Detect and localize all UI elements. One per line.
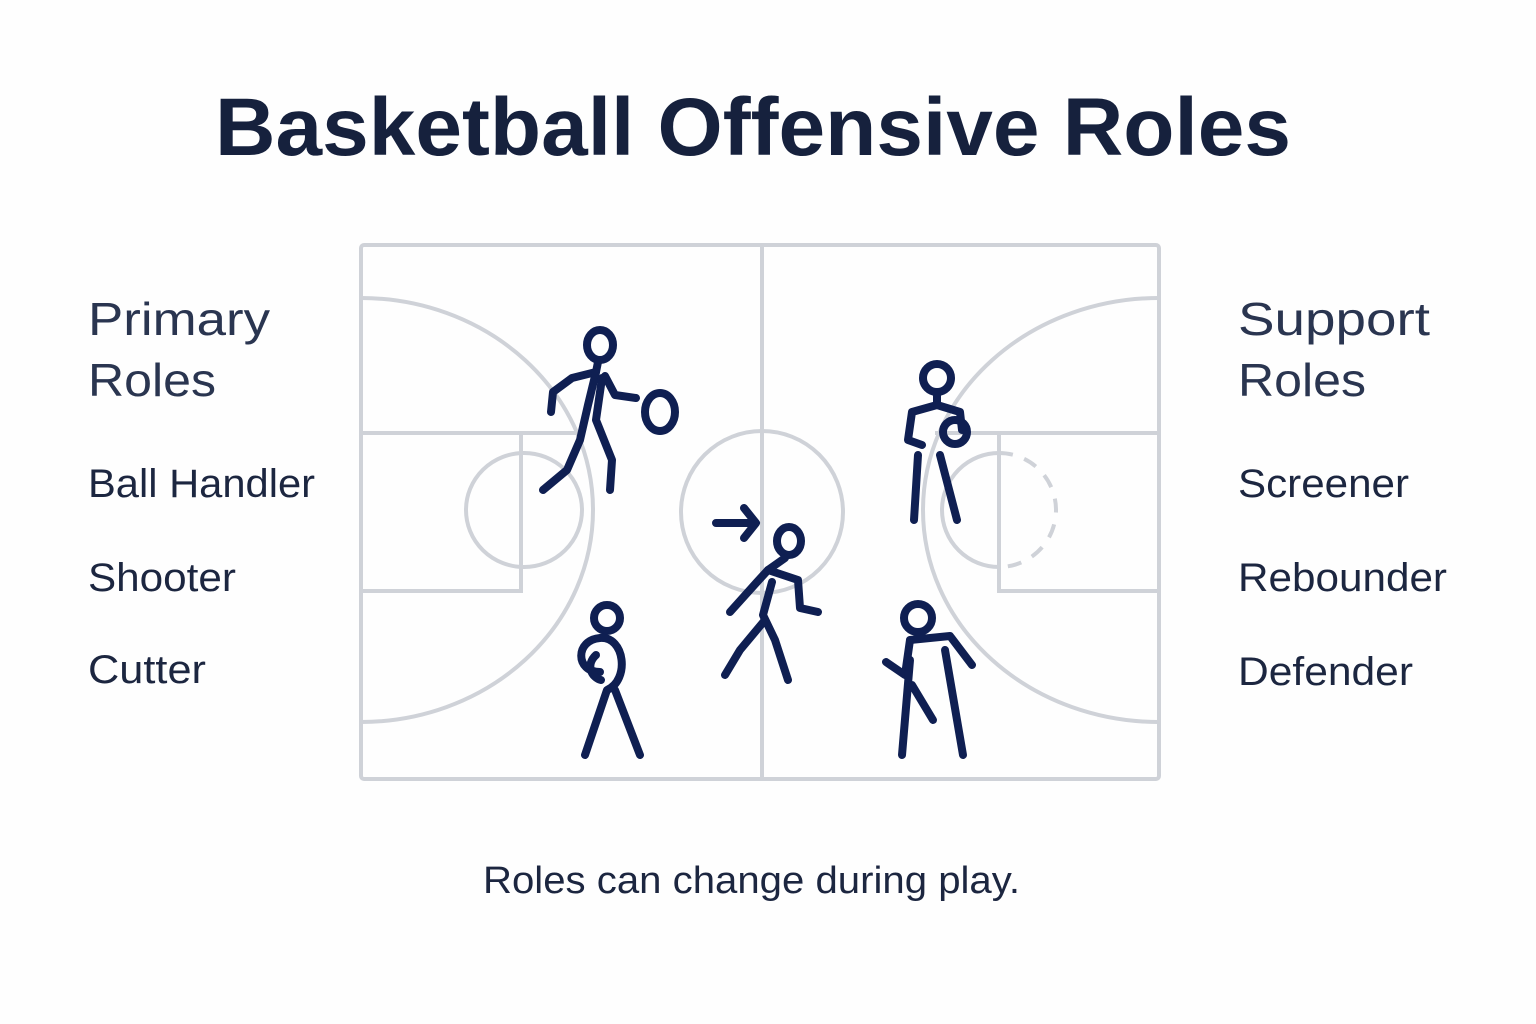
title: Basketball Offensive Roles bbox=[215, 82, 1291, 173]
arrow bbox=[716, 508, 756, 538]
panel: primary roles: Ball Handler bbox=[88, 462, 315, 506]
court bbox=[361, 245, 1159, 779]
player: screener bbox=[908, 364, 967, 520]
panel: support roles: Screener bbox=[1238, 462, 1409, 506]
panel: support roles: Rebounder bbox=[1238, 556, 1447, 600]
player: shooter bbox=[581, 605, 640, 755]
player: defender bbox=[886, 604, 972, 755]
panel: support roles: Roles bbox=[1238, 354, 1366, 406]
players bbox=[543, 330, 972, 755]
panel: support roles: Defender bbox=[1238, 650, 1413, 694]
panel: primary roles: Primary bbox=[88, 293, 270, 345]
player: cutter bbox=[725, 527, 818, 680]
panel: primary roles: Roles bbox=[88, 354, 216, 406]
panel: support roles: Support bbox=[1238, 293, 1430, 345]
panel: primary roles: Shooter bbox=[88, 556, 236, 600]
panel: primary roles bbox=[88, 293, 315, 692]
panel: support roles bbox=[1238, 293, 1447, 694]
footer note: Roles can change during play. bbox=[483, 860, 1020, 902]
panel: primary roles: Cutter bbox=[88, 648, 206, 692]
player: ball handler bbox=[543, 330, 675, 490]
